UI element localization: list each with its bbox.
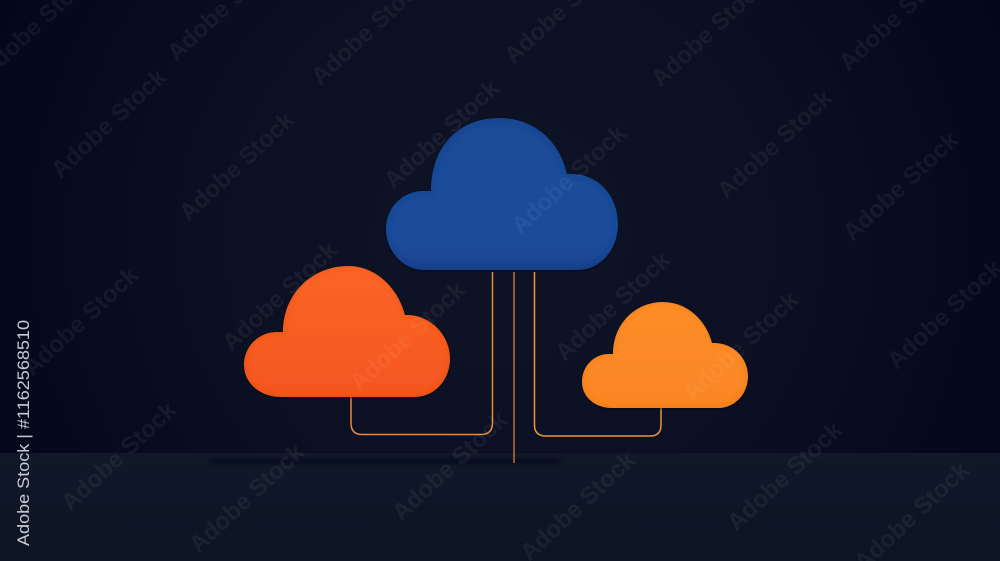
watermarks: Adobe Stock — [184, 438, 310, 558]
watermarks: Adobe Stock — [345, 276, 471, 396]
floor — [0, 453, 1000, 561]
watermarks: Adobe Stock — [379, 74, 505, 194]
connector: blue cloud to red cloud — [351, 272, 492, 434]
stock id label: Adobe Stock | #1162568510 — [14, 320, 33, 546]
watermarks: Adobe Stock — [46, 63, 172, 183]
watermarks: Adobe Stock — [506, 119, 632, 239]
cloud: red-orange — [244, 266, 450, 397]
watermarks: Adobe Stock — [838, 126, 964, 246]
watermarks: Adobe Stock — [18, 261, 144, 381]
connector: blue cloud to amber cloud — [534, 272, 661, 436]
watermarks: Adobe Stock — [550, 246, 676, 366]
watermarks: Adobe Stock — [712, 84, 838, 204]
watermarks: Adobe Stock — [174, 106, 300, 226]
connector: blue cloud center trunk — [513, 272, 515, 463]
watermarks: Adobe Stock — [56, 396, 182, 516]
cloud: amber — [582, 302, 748, 408]
watermarks: Adobe Stock — [678, 286, 804, 406]
cloud: blue — [386, 118, 618, 270]
watermarks: Adobe Stock — [217, 236, 343, 356]
watermarks: Adobe Stock — [387, 406, 513, 526]
watermarks: Adobe Stock — [722, 416, 848, 536]
